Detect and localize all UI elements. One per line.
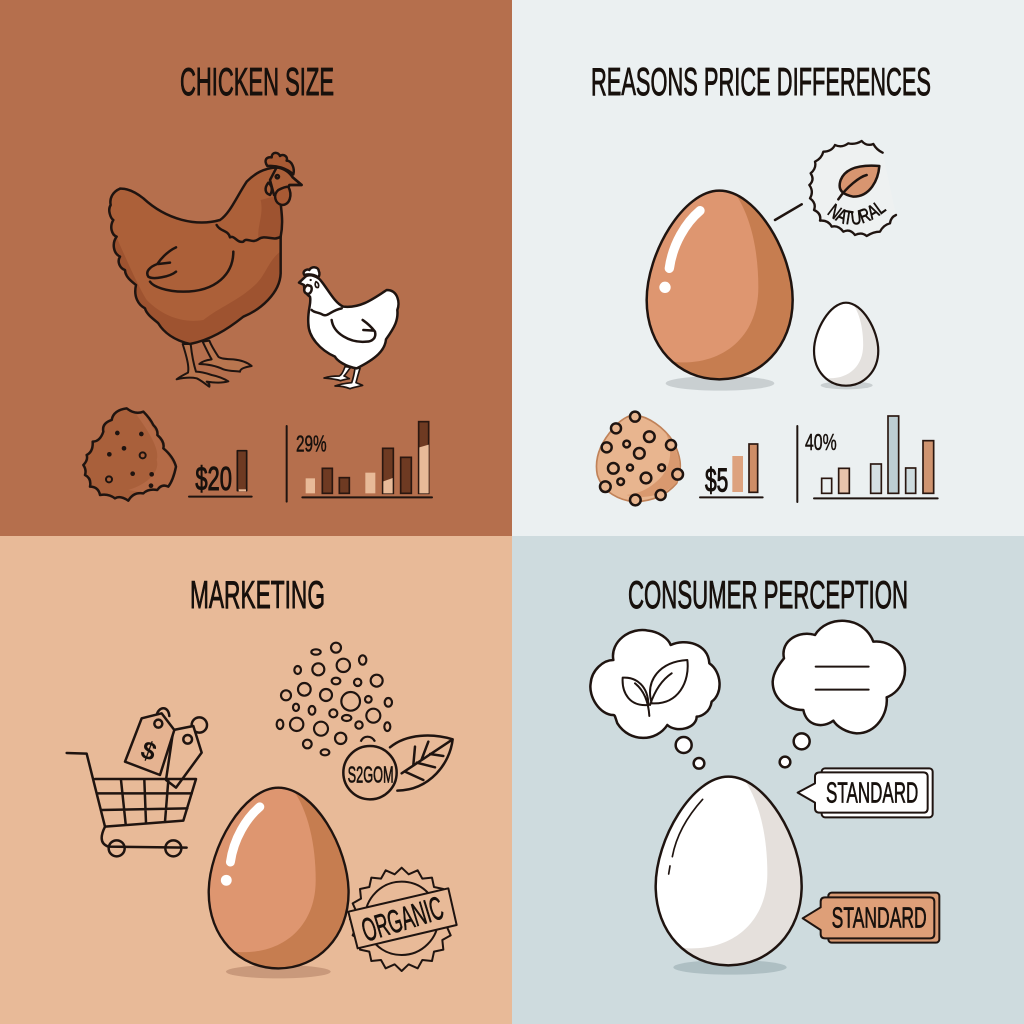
icon: feed pile — [83, 408, 176, 501]
icon: bubbles cluster — [277, 643, 392, 755]
label: standard brown tag — [803, 893, 939, 943]
bar chart: 29%: 29% — [296, 430, 327, 456]
label: standard white tag: STANDARD — [826, 778, 918, 810]
icon: shopping cart with price tags — [67, 708, 207, 856]
title: chicken size: CHICKEN SIZE — [180, 61, 334, 104]
panel: marketing — [0, 536, 512, 1024]
icon: large brown egg — [633, 184, 793, 391]
thought bubble: lines — [773, 621, 905, 767]
price with bars: $5: $5 — [705, 463, 728, 500]
price with bar: $20: $20 — [195, 461, 232, 498]
badge: natural: NATURAL — [827, 202, 887, 225]
bar chart: 29% — [287, 422, 432, 502]
icon: small white egg — [808, 300, 878, 389]
title: marketing: MARKETING — [190, 574, 325, 617]
badge: organic — [348, 868, 457, 971]
icon: brown egg — [195, 781, 349, 978]
back price tag — [166, 717, 207, 788]
front price tag: $ — [137, 736, 160, 767]
thought bubble: plant — [590, 630, 720, 769]
price with bar: $20 — [189, 451, 252, 498]
badge: natural — [808, 140, 898, 238]
panel: consumer perception — [512, 536, 1024, 1024]
bar chart: 40% — [797, 416, 938, 502]
icon: leaf — [390, 736, 453, 791]
front price tag — [125, 708, 174, 775]
badge: organic: ORGANIC — [357, 889, 448, 949]
comb — [266, 153, 294, 174]
icon: small white hen — [299, 267, 398, 389]
price with bars: $5 — [700, 444, 763, 500]
icon: large white egg — [642, 770, 802, 975]
icon: large brown hen — [103, 153, 302, 387]
shopping cart — [67, 753, 196, 856]
label: standard white tag — [798, 768, 933, 817]
connector line to badge — [775, 204, 802, 220]
icon: speckled feed — [596, 412, 683, 505]
label: standard brown tag: STANDARD — [832, 902, 927, 934]
bar chart: 40%: 40% — [805, 429, 837, 455]
icon: coin with price: S2GOM — [348, 762, 394, 788]
panel: chicken size — [0, 0, 512, 536]
icon: coin with price — [343, 746, 397, 799]
panel: reasons price differences — [512, 0, 1024, 536]
